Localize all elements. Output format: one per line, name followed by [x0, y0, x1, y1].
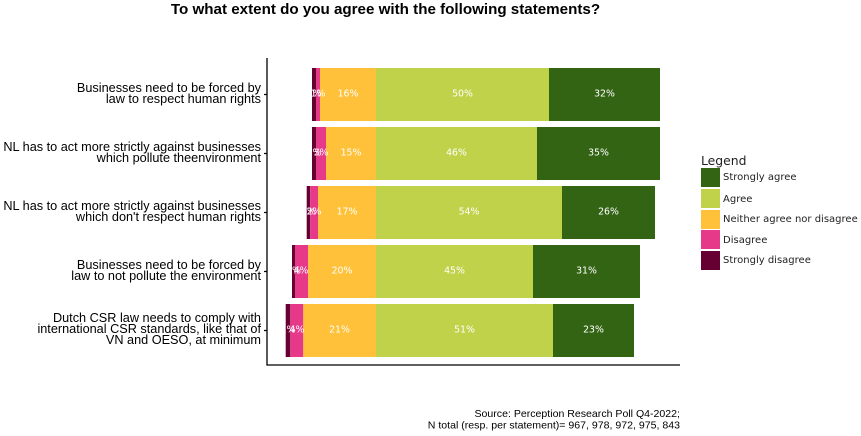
title: To what extent do you agree with the following statements?	[171, 1, 600, 18]
row: not pollute the environment: 45%	[444, 266, 465, 277]
category label: Dutch CSR law needs to comply with	[53, 311, 261, 325]
legend: Neither agree nor disagree	[723, 214, 858, 225]
legend	[701, 153, 858, 270]
legend: Agree	[723, 194, 752, 205]
category label: law to respect human rights	[106, 92, 261, 106]
source note: N total (resp. per statement)= 967, 978, 972, 975, 843	[428, 420, 680, 432]
row: respect human rights strictly	[3, 186, 655, 239]
source note: Source: Perception Research Poll Q4-2022;	[474, 408, 680, 420]
row: forced to respect human rights: 50%	[452, 89, 473, 100]
category label: international CSR standards, like that of	[37, 322, 261, 336]
row: not pollute the environment: 20%	[332, 266, 353, 277]
row: Dutch CSR law: 1%	[281, 325, 296, 336]
category label: which pollute theenvironment	[96, 151, 261, 165]
row: respect human rights strictly: 54%	[459, 207, 480, 218]
axes	[264, 58, 680, 365]
legend: Strongly agree	[723, 172, 797, 183]
category label: VN and OESO, at minimum	[106, 333, 261, 347]
row: pollute the environment strictly	[3, 127, 660, 180]
row: pollute the environment strictly: 15%	[341, 148, 362, 159]
row: respect human rights strictly: 17%	[337, 207, 358, 218]
row: forced to respect human rights: 1%	[307, 89, 322, 100]
legend title: Legend	[701, 153, 747, 168]
row: respect human rights strictly: 1%	[301, 207, 316, 218]
category label: Businesses need to be forced by	[77, 81, 262, 95]
row: not pollute the environment	[71, 245, 640, 298]
row: Dutch CSR law: 51%	[454, 325, 475, 336]
row: pollute the environment strictly: 1%	[307, 148, 322, 159]
category label: law to not pollute the environment	[71, 269, 261, 283]
row: pollute the environment strictly: 46%	[446, 148, 467, 159]
legend: Strongly disagree	[723, 255, 811, 266]
row: Dutch CSR law	[37, 304, 634, 357]
chart: diverging stacked bars	[3, 58, 680, 365]
row: Dutch CSR law: 23%	[583, 325, 604, 336]
category label: which don't respect human rights	[75, 210, 261, 224]
row: not pollute the environment: 4%	[294, 266, 309, 277]
row: not pollute the environment: 1%	[286, 266, 301, 277]
row: pollute the environment strictly: 35%	[588, 148, 609, 159]
row: forced to respect human rights	[77, 68, 660, 121]
category label: NL has to act more strictly against businesses	[3, 199, 261, 213]
row: not pollute the environment: 31%	[576, 266, 597, 277]
row: respect human rights strictly: 2%	[307, 207, 322, 218]
category label: Businesses need to be forced by	[77, 258, 262, 272]
row: forced to respect human rights: 16%	[338, 89, 359, 100]
row: forced to respect human rights: 32%	[594, 89, 615, 100]
row: forced to respect human rights: 1%	[311, 89, 326, 100]
row: pollute the environment strictly: 3%	[314, 148, 329, 159]
row: respect human rights strictly: 26%	[598, 207, 619, 218]
row: Dutch CSR law: 4%	[290, 325, 305, 336]
row: Dutch CSR law: 21%	[329, 325, 350, 336]
legend: Disagree	[723, 235, 767, 246]
category label: NL has to act more strictly against businesses	[3, 140, 261, 154]
